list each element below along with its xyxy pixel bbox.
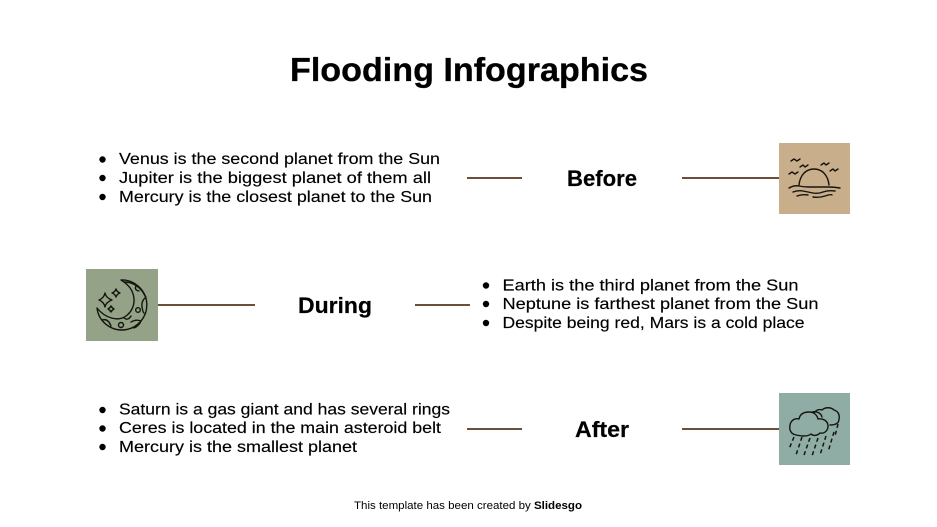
text block: after bullets: Mercury is the smallest planet: [119, 439, 358, 456]
text block: before bullets: Mercury is the closest planet to the Sun: [119, 189, 432, 206]
text block: during bullets: Despite being red, Mars is a cold place: [502, 315, 805, 332]
text block: after bullets: [99, 402, 450, 456]
footer credit: This template has been created by Slidesgo: [354, 500, 582, 512]
connector: before left: [467, 177, 522, 179]
text block: during bullets: Neptune is farthest planet from the Sun: [502, 296, 818, 313]
connector: before right: [682, 177, 779, 179]
text block: before bullets: [99, 151, 440, 206]
icon: sunset over water: [779, 143, 850, 214]
text block: during bullets: [483, 278, 818, 332]
panel: before: [99, 143, 850, 214]
icon: rain clouds: [779, 393, 850, 465]
panel: during: [86, 269, 818, 341]
connector: after left: [467, 428, 522, 430]
heading: before: Before: [567, 166, 637, 191]
text block: after bullets: Saturn is a gas giant and has several rings: [119, 402, 450, 418]
text block: after bullets: Ceres is located in the main asteroid belt: [119, 420, 442, 437]
connector: during right: [415, 304, 470, 306]
text block: before bullets: Jupiter is the biggest planet of them all: [119, 170, 431, 187]
connector: during left: [158, 304, 255, 306]
text block: before bullets: Venus is the second planet from the Sun: [119, 151, 440, 168]
title: Flooding Infographics: [290, 51, 648, 88]
heading: during: During: [298, 293, 372, 318]
icon: crescent moon and stars: [86, 269, 158, 341]
panel: after: [99, 393, 850, 465]
heading: after: After: [575, 417, 629, 442]
text block: during bullets: Earth is the third planet from the Sun: [502, 278, 798, 294]
connector: after right: [682, 428, 779, 430]
